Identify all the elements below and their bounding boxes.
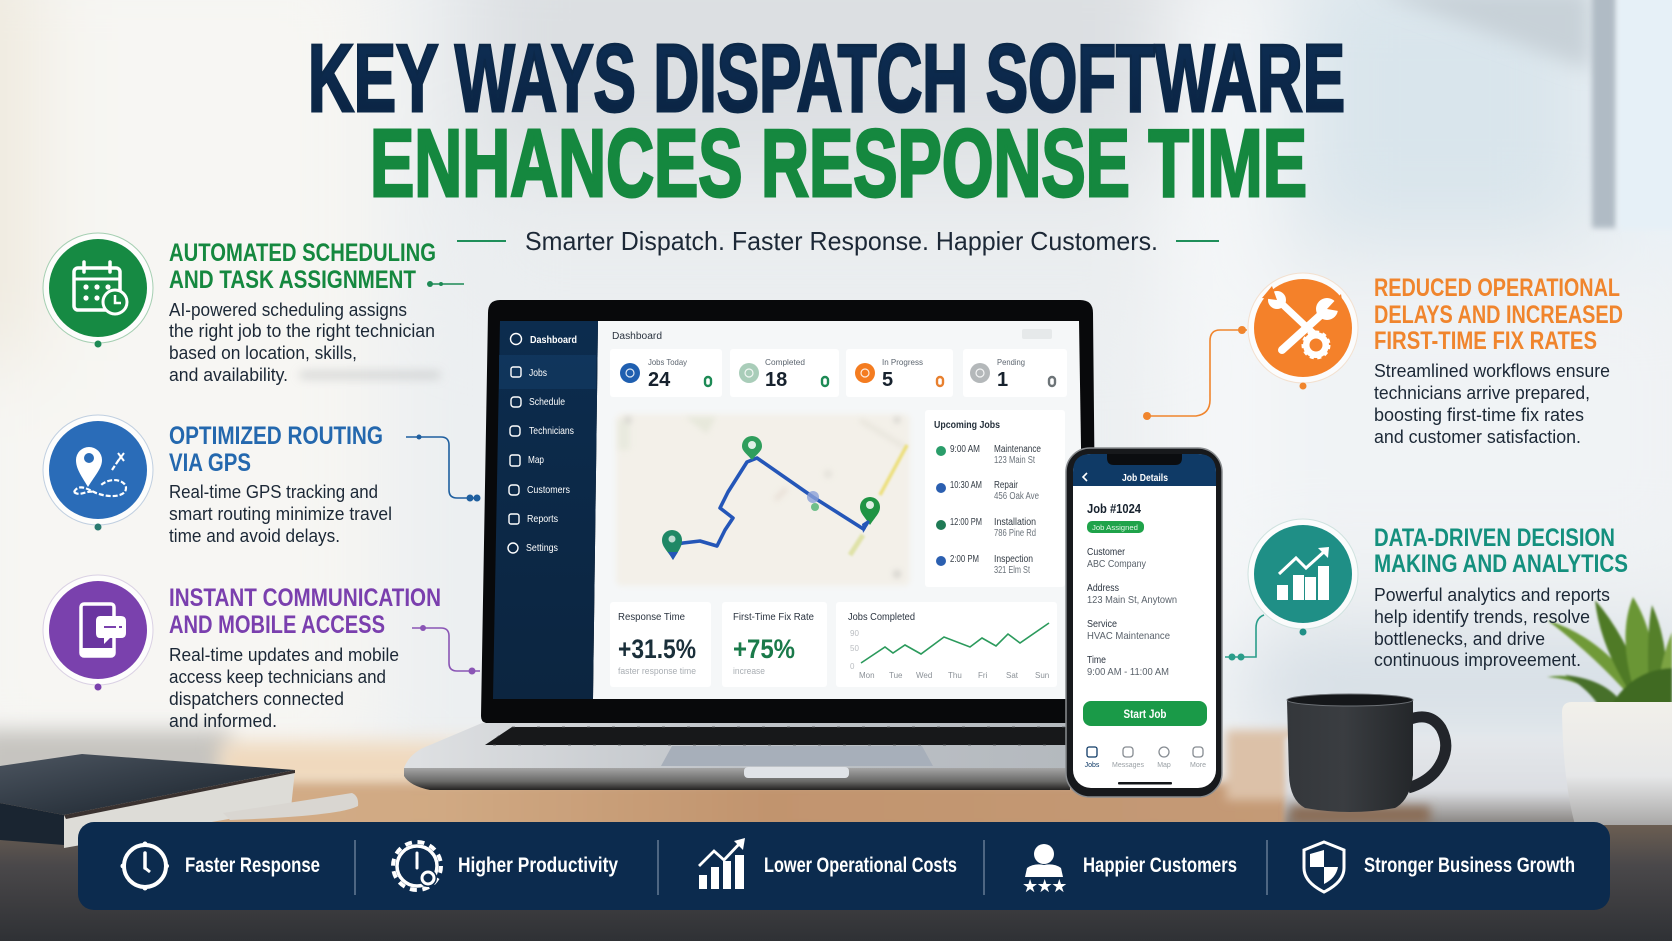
panel: instant communication xyxy=(43,575,441,731)
phone tab bar: More xyxy=(1190,762,1206,769)
panel: data-driven decisions xyxy=(1248,519,1628,670)
line chart: jobs completed: Sat xyxy=(1006,671,1019,680)
upcoming jobs list: Inspection xyxy=(994,554,1033,565)
dashboard title: Dashboard xyxy=(612,331,662,342)
connector: communication to laptop xyxy=(412,628,480,671)
body text: and informed. xyxy=(169,710,277,731)
metric: response time xyxy=(610,602,711,687)
metric: response time: +31.5% xyxy=(618,634,696,664)
stat cards: 24 xyxy=(648,369,671,391)
heading: AUTOMATED SCHEDULING xyxy=(169,239,436,267)
metric: first-time fix rate: increase xyxy=(733,666,765,676)
upcoming jobs list: 9:00 AM xyxy=(950,444,980,455)
heading: AND MOBILE ACCESS xyxy=(169,611,385,639)
heading: INSTANT COMMUNICATION xyxy=(169,584,441,612)
job details: Address xyxy=(1087,582,1119,594)
connector nodes xyxy=(416,281,1246,674)
body text xyxy=(1374,584,1610,670)
job details: HVAC Maintenance xyxy=(1087,630,1170,642)
body text xyxy=(169,644,399,731)
upcoming jobs list: 2:00 PM xyxy=(950,554,979,565)
line chart: jobs completed: Fri xyxy=(978,671,988,680)
connector: routing to laptop xyxy=(406,437,480,498)
dashboard main area xyxy=(593,321,1085,699)
sidebar: Technicians xyxy=(529,425,574,437)
upcoming jobs list: 786 Pine Rd xyxy=(994,528,1036,539)
phone tab bar xyxy=(1085,747,1206,784)
line chart: jobs completed: Mon xyxy=(859,671,875,680)
body text: boosting first-time fix rates xyxy=(1374,404,1584,425)
benefit: higher productivity xyxy=(393,842,618,890)
body text: Powerful analytics and reports xyxy=(1374,584,1610,605)
upcoming jobs list: 123 Main St xyxy=(994,455,1035,466)
sidebar: Customers xyxy=(527,484,570,496)
laptop base xyxy=(404,723,1070,790)
desk surface xyxy=(0,730,1672,832)
metric: first-time fix rate: +75% xyxy=(733,634,795,664)
body text: technicians arrive prepared, xyxy=(1374,382,1590,403)
benefit: happier customers xyxy=(1022,844,1237,896)
stat cards: Pending xyxy=(997,357,1025,367)
upcoming jobs list: 12:00 PM xyxy=(950,517,982,528)
job details: Job Assigned xyxy=(1092,525,1138,532)
benefit: lower operational costs: Lower Operational Costs xyxy=(764,854,957,877)
metric: response time: Response Time xyxy=(618,612,685,623)
line chart: jobs completed: 50 xyxy=(850,644,859,653)
heading xyxy=(1374,524,1628,578)
body text xyxy=(1374,360,1610,447)
icon: GPS pin and route xyxy=(43,415,153,530)
stat cards: In Progress xyxy=(882,357,923,367)
phone xyxy=(1066,448,1222,797)
line chart: jobs completed: Sun xyxy=(1035,671,1049,680)
panel: reduced delays xyxy=(1248,273,1623,447)
start job button: Start Job xyxy=(1124,709,1166,721)
sidebar: Dashboard xyxy=(530,334,577,346)
upcoming jobs list: 10:30 AM xyxy=(950,480,982,491)
job details: 9:00 AM - 11:00 AM xyxy=(1087,666,1169,678)
job details: Service xyxy=(1087,618,1117,630)
phone tab bar: Jobs xyxy=(1085,762,1100,769)
potted plant xyxy=(1547,597,1672,825)
body text: time and avoid delays. xyxy=(169,525,340,546)
upcoming jobs list: 321 Elm St xyxy=(994,565,1030,576)
body text: Real-time updates and mobile xyxy=(169,644,399,665)
upcoming jobs list: Installation xyxy=(994,517,1036,528)
heading: AND TASK ASSIGNMENT xyxy=(169,266,416,294)
stat cards: Completed xyxy=(765,357,805,367)
icon: calendar with clock xyxy=(43,233,153,348)
body text: smart routing minimize travel xyxy=(169,503,392,524)
job details xyxy=(1087,501,1177,678)
top-right control xyxy=(1022,329,1052,339)
phone tab bar: Map xyxy=(1157,762,1171,769)
sidebar xyxy=(493,321,598,699)
sidebar: Reports xyxy=(527,513,558,525)
subtitle with side rules: Smarter Dispatch. Faster Response. Happier Customers. xyxy=(525,226,1158,256)
panel: automated scheduling xyxy=(43,233,436,385)
coffee mug xyxy=(1287,694,1446,812)
job details: Customer xyxy=(1087,546,1125,558)
body text: Streamlined workflows ensure xyxy=(1374,360,1610,381)
upcoming jobs list: 456 Oak Ave xyxy=(994,491,1039,502)
stat cards: 18 xyxy=(765,369,787,391)
heading: OPTIMIZED ROUTING xyxy=(169,422,383,450)
metric: first-time fix rate xyxy=(722,602,827,687)
body text: continuous improveement. xyxy=(1374,649,1581,670)
connector: delays to laptop xyxy=(1146,330,1247,416)
icon: phone with chat bubble xyxy=(43,575,153,690)
body text: and availability. xyxy=(169,364,288,385)
phone header xyxy=(1073,454,1216,486)
body text: help identify trends, resolve xyxy=(1374,606,1590,627)
phone header: Job Details xyxy=(1122,472,1168,484)
body text: access keep technicians and xyxy=(169,666,386,687)
body text: AI-powered scheduling assigns xyxy=(169,299,407,320)
body text: based on location, skills, xyxy=(169,342,357,363)
notebook and pen on desk xyxy=(0,754,358,848)
map with route xyxy=(616,414,910,586)
upcoming jobs list: Repair xyxy=(994,480,1019,491)
benefit: happier customers: Happier Customers xyxy=(1083,854,1237,877)
sidebar: Schedule xyxy=(529,396,565,408)
stat cards: 1 xyxy=(997,369,1008,391)
benefit: lower operational costs xyxy=(699,838,957,889)
body text xyxy=(169,481,392,546)
stat cards: Jobs Today xyxy=(648,357,688,367)
body text: bottlenecks, and drive xyxy=(1374,628,1545,649)
metric: response time: faster response time xyxy=(618,666,696,676)
connector: scheduling to laptop xyxy=(428,283,464,285)
heading: VIA GPS xyxy=(169,449,251,477)
metric: first-time fix rate: First-Time Fix Rate xyxy=(733,612,814,623)
heading xyxy=(169,584,441,639)
heading xyxy=(169,239,436,294)
line chart: jobs completed xyxy=(836,602,1057,687)
body text xyxy=(169,299,435,385)
benefit: stronger business growth xyxy=(1304,842,1575,892)
icon: wrench and gear xyxy=(1248,273,1358,390)
benefit: happier customers: ★★★ xyxy=(1022,876,1066,896)
connector: analytics to phone xyxy=(1225,615,1264,657)
sidebar: Map xyxy=(528,454,544,466)
line chart: jobs completed: 90 xyxy=(850,629,859,638)
upcoming jobs list xyxy=(925,410,1065,587)
job details: Job #1024 xyxy=(1087,501,1142,516)
body text: dispatchers connected xyxy=(169,688,344,709)
icon: bars and trend arrow xyxy=(1248,519,1358,636)
heading xyxy=(1374,274,1623,355)
line chart: jobs completed: Wed xyxy=(916,671,932,680)
line chart: jobs completed: 0 xyxy=(850,662,855,671)
body text: the right job to the right technician xyxy=(169,320,435,341)
laptop lid xyxy=(481,300,1097,723)
sidebar: Jobs xyxy=(529,367,547,379)
job details: ABC Company xyxy=(1087,558,1147,570)
heading xyxy=(169,422,383,477)
line chart: jobs completed: Thu xyxy=(948,671,962,680)
job details: 123 Main St, Anytown xyxy=(1087,594,1177,606)
benefit: faster response: Faster Response xyxy=(185,854,320,877)
bottom benefits bar xyxy=(78,822,1610,910)
phone tab bar: Messages xyxy=(1112,762,1144,769)
heading: DATA-DRIVEN DECISION xyxy=(1374,524,1615,552)
benefit: faster response xyxy=(120,842,320,890)
benefit: higher productivity: Higher Productivity xyxy=(458,854,618,877)
stat cards: 5 xyxy=(882,369,893,391)
heading: FIRST-TIME FIX RATES xyxy=(1374,327,1597,355)
line chart: jobs completed: Jobs Completed xyxy=(848,612,915,623)
line chart: jobs completed: Tue xyxy=(889,671,903,680)
panel: optimized routing xyxy=(43,415,392,546)
laptop xyxy=(404,300,1097,790)
start job button xyxy=(1083,701,1207,726)
stat cards xyxy=(610,349,1067,397)
job details: Time xyxy=(1087,654,1106,666)
upcoming jobs list: Maintenance xyxy=(994,444,1041,455)
body text: and customer satisfaction. xyxy=(1374,426,1581,447)
benefit: stronger business growth: Stronger Business Growth xyxy=(1364,854,1575,877)
upcoming jobs list: Upcoming Jobs xyxy=(934,420,1000,431)
sidebar: Settings xyxy=(526,542,558,554)
title xyxy=(308,25,1345,217)
body text: Real-time GPS tracking and xyxy=(169,481,378,502)
